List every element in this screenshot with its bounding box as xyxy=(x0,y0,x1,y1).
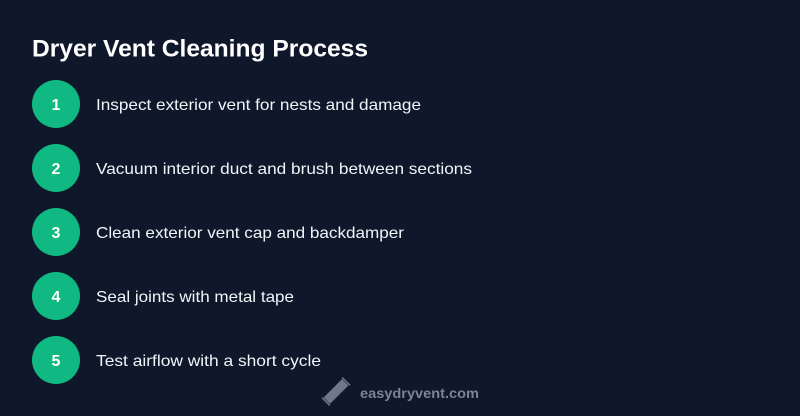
step 3 xyxy=(32,208,405,256)
step 3 badge xyxy=(32,208,80,256)
step 2 xyxy=(32,144,472,192)
step 3 text: Clean exterior vent cap and backdamper xyxy=(96,225,405,242)
domain text: easydryvent.com xyxy=(360,385,479,401)
step 1 xyxy=(32,80,421,128)
step 5 badge xyxy=(32,336,80,384)
step 3 badge: 3 xyxy=(52,225,61,242)
step 1 text: Inspect exterior vent for nests and damage xyxy=(96,97,421,114)
step 5 text: Test airflow with a short cycle xyxy=(96,353,321,370)
step 2 badge: 2 xyxy=(52,161,61,178)
step 4 xyxy=(32,272,294,320)
step 4 badge xyxy=(32,272,80,320)
step 2 text: Vacuum interior duct and brush between sections xyxy=(96,161,472,178)
icon: vent duct xyxy=(322,377,350,406)
title: Dryer Vent Cleaning Process xyxy=(32,36,368,62)
step 2 badge xyxy=(32,144,80,192)
step 4 text: Seal joints with metal tape xyxy=(96,289,294,306)
step 1 badge: 1 xyxy=(52,97,61,114)
step 1 badge xyxy=(32,80,80,128)
step 5 badge: 5 xyxy=(52,353,61,370)
step 4 badge: 4 xyxy=(52,289,61,306)
footer logo and domain xyxy=(322,377,479,406)
step 5 xyxy=(32,336,321,384)
